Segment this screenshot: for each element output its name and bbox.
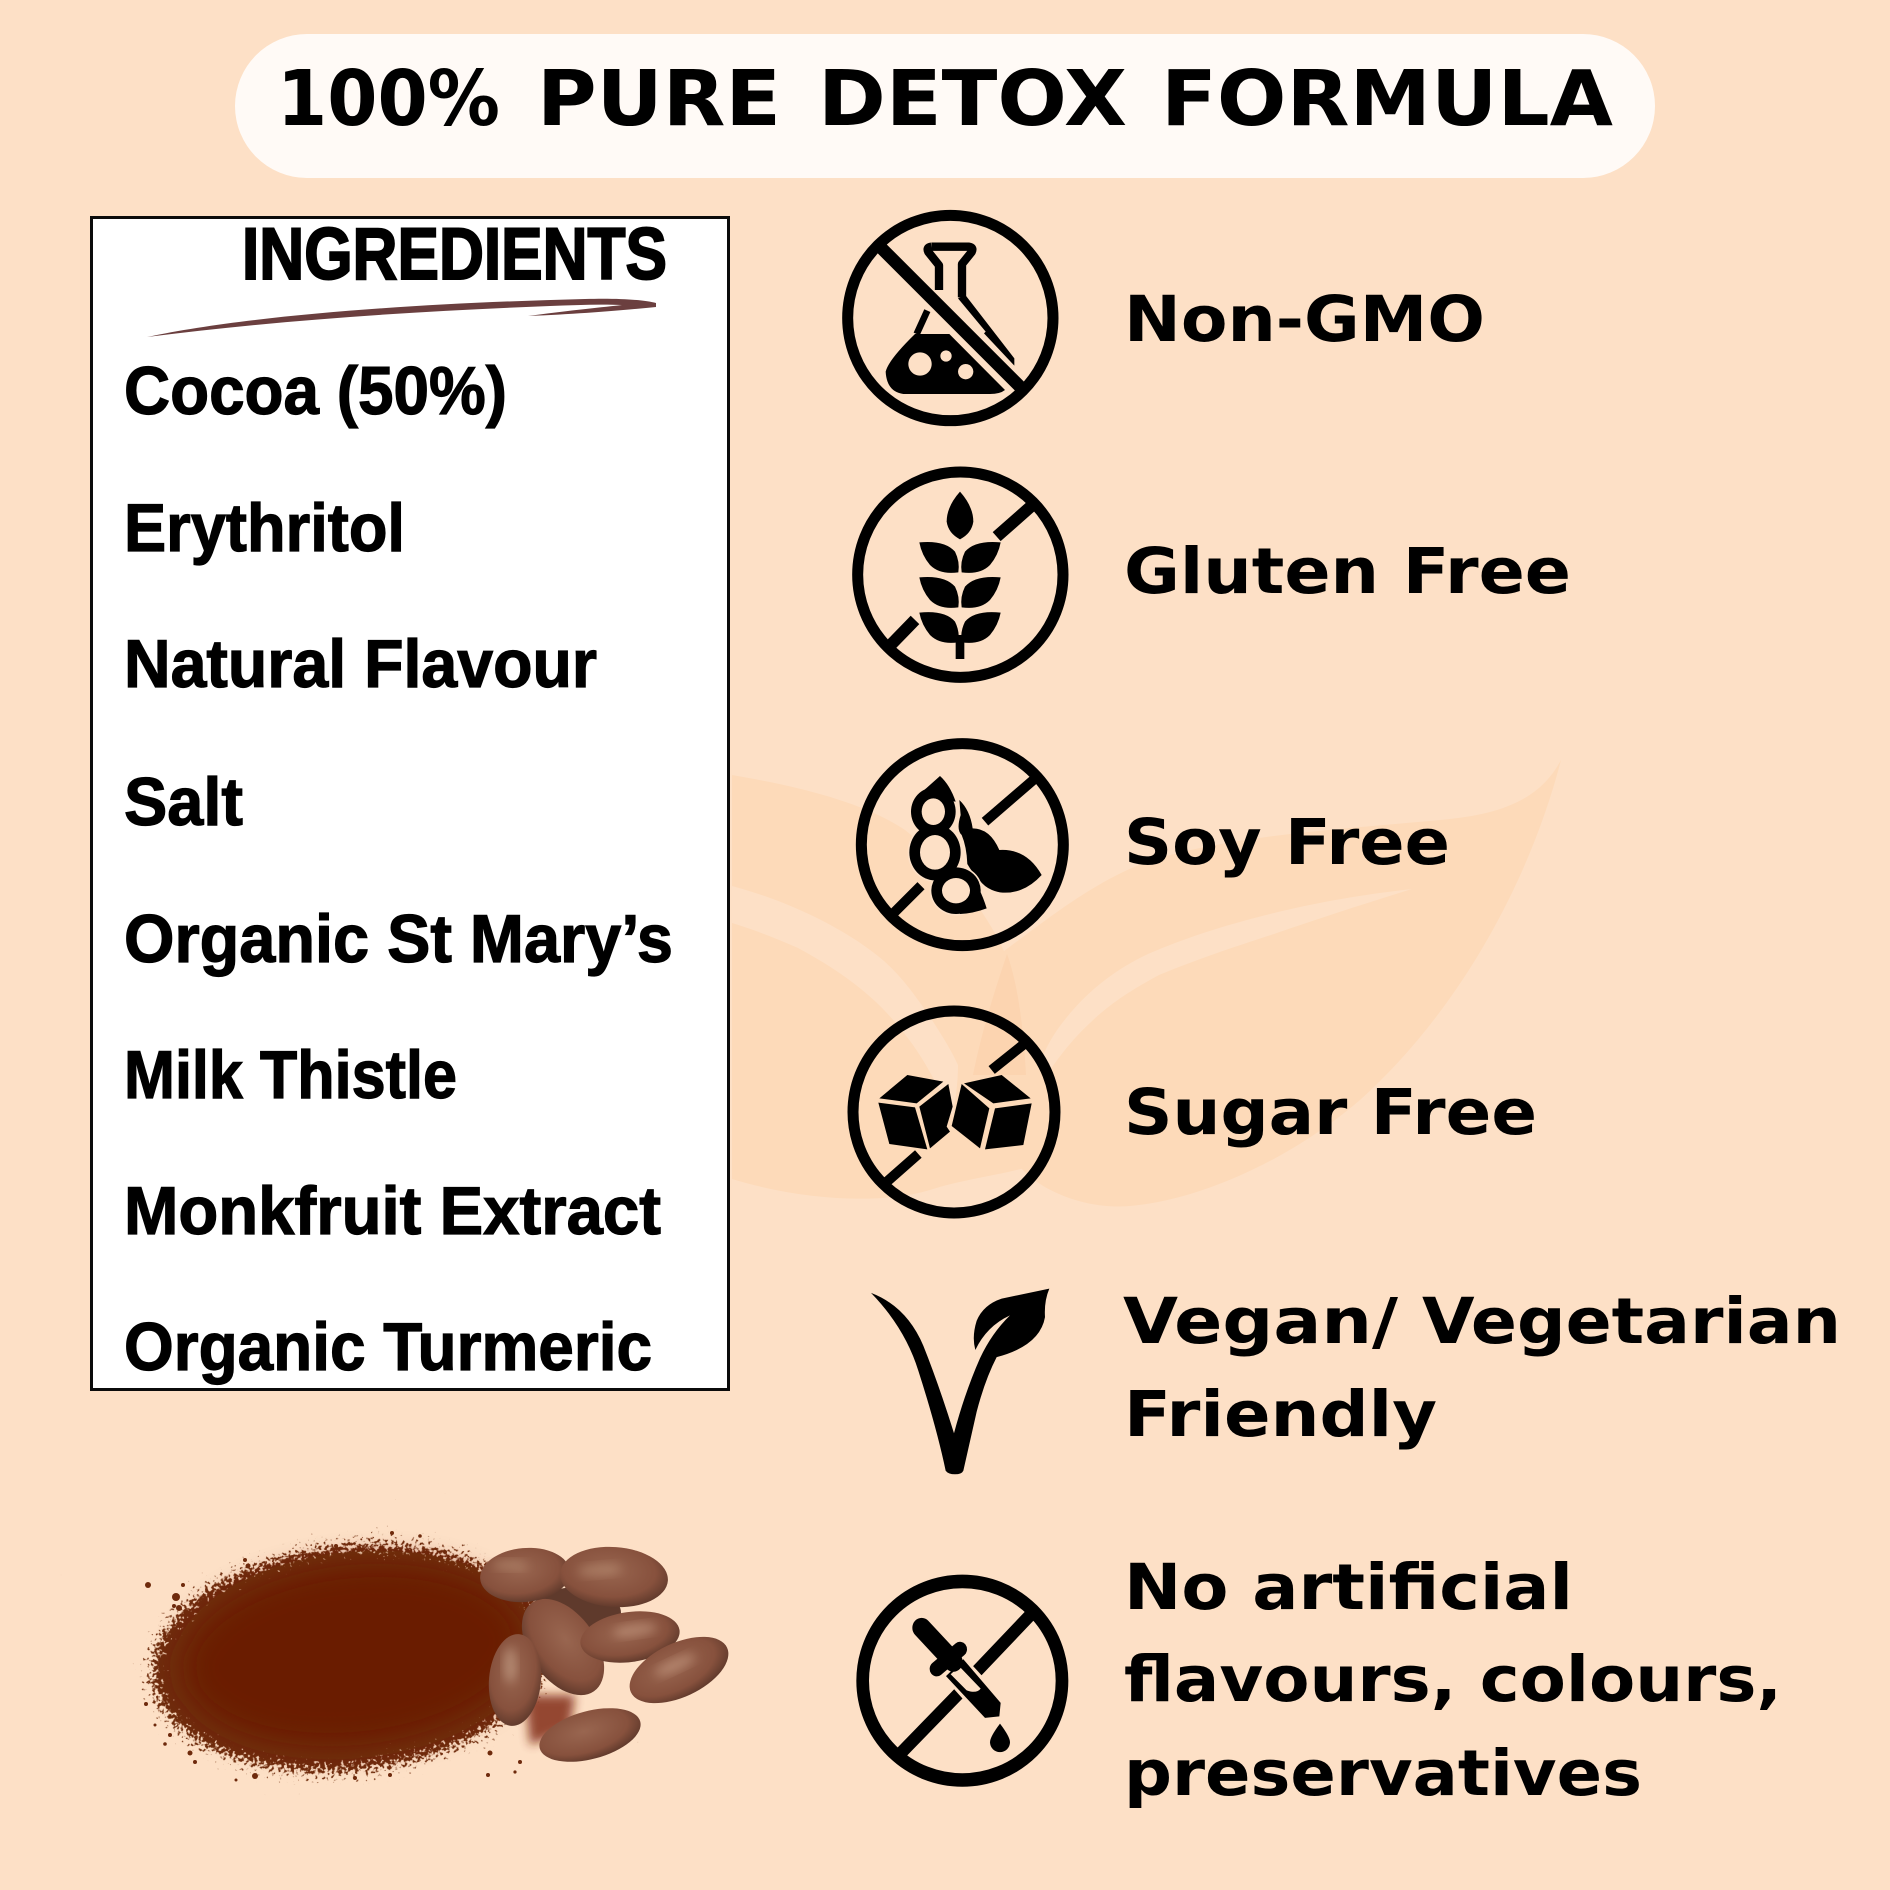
title text: 100% <box>277 55 500 144</box>
icon: non-GMO flask <box>848 215 1053 421</box>
label: sugar free: Sugar Free <box>1124 1076 1537 1149</box>
cocoa powder pile <box>142 1528 575 1788</box>
icon: vegan V leaf <box>871 1289 1049 1474</box>
icon: gluten free wheat <box>858 472 1063 677</box>
panel: ingredients <box>92 214 728 1390</box>
title text: FORMULA <box>1161 55 1613 144</box>
ingredient list: Cocoa (50%) <box>124 353 507 429</box>
label: vegan vegetarian friendly: Vegetarian <box>1422 1285 1841 1358</box>
title text: PURE <box>537 55 781 144</box>
brush underline <box>147 299 656 337</box>
label: no artificial flavours: No artificial <box>1124 1551 1573 1624</box>
title text: DETOX <box>818 55 1127 144</box>
label: no artificial flavours <box>1124 1551 1782 1810</box>
cocoa beans <box>478 1543 738 1772</box>
ingredient list <box>124 353 673 1385</box>
ingredient list: Milk Thistle <box>124 1037 457 1113</box>
ingredient list: Monkfruit Extract <box>124 1173 661 1249</box>
label: no artificial flavours: preservatives <box>1124 1737 1642 1810</box>
title text <box>277 55 1613 144</box>
ingredient list: Natural Flavour <box>124 626 597 702</box>
label: soy free: Soy Free <box>1124 806 1450 879</box>
ingredient list: Organic Turmeric <box>124 1309 652 1385</box>
illustration: cocoa powder and beans <box>142 1528 738 1788</box>
label: no artificial flavours: flavours, colours, <box>1124 1643 1782 1716</box>
label: vegan vegetarian friendly <box>1123 1285 1841 1451</box>
ingredient list: Erythritol <box>124 490 405 566</box>
title pill <box>235 34 1655 178</box>
label: vegan vegetarian friendly: Vegan/ <box>1123 1285 1399 1358</box>
icon: no artificial dropper <box>863 1581 1062 1780</box>
label: non-GMO: Non-GMO <box>1124 283 1485 356</box>
label: vegan vegetarian friendly: Friendly <box>1124 1378 1437 1451</box>
heading: ingredients: INGREDIENTS <box>242 214 667 295</box>
icon: sugar free <box>853 1011 1055 1213</box>
label: gluten free: Gluten Free <box>1124 535 1571 608</box>
icon: soy free <box>861 744 1063 946</box>
ingredient list: Organic St Mary’s <box>124 901 673 977</box>
watermark: leaf logo <box>732 760 1561 1207</box>
ingredient list: Salt <box>124 764 243 840</box>
